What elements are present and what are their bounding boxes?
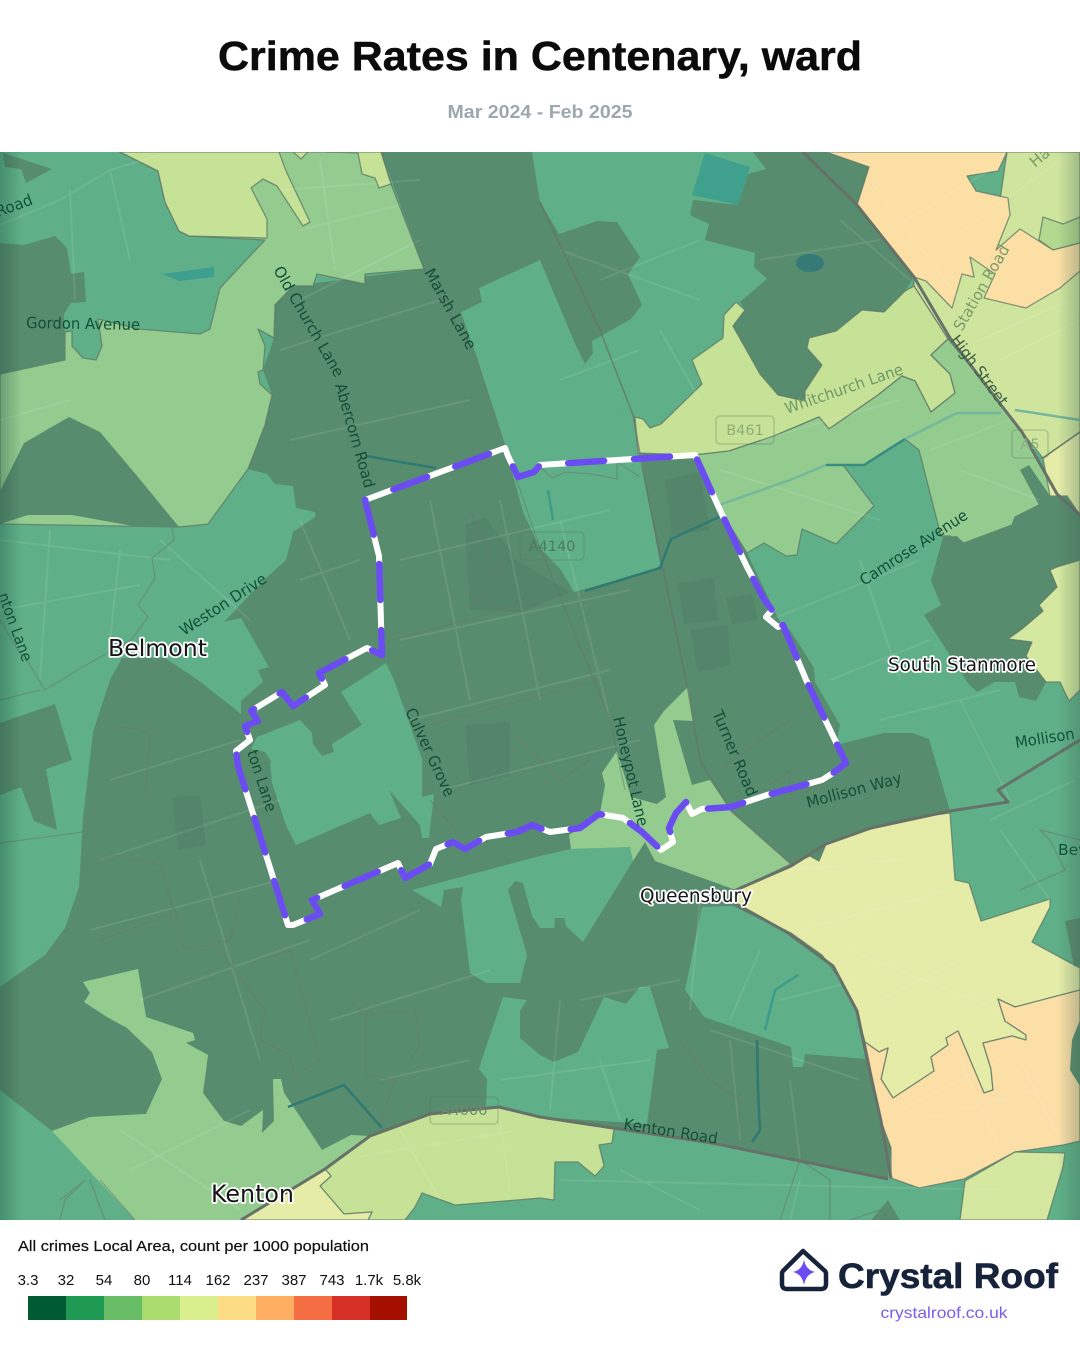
place label: Kenton: Kenton xyxy=(211,1180,294,1208)
road label: Gordon Avenue: Gordon Avenue xyxy=(26,314,140,334)
area: pale green Kenton xyxy=(320,1107,614,1220)
icon: Crystal Roof house logo xyxy=(782,1251,826,1289)
road label: Marsh Lane: Marsh Lane xyxy=(421,265,480,353)
legend scale labels: 54 xyxy=(96,1272,112,1289)
map edge shading xyxy=(0,152,1080,1220)
water: pond in north east xyxy=(796,254,824,272)
road shield: A4006 xyxy=(430,1097,498,1124)
legend scale labels: 387 xyxy=(281,1272,307,1289)
road shield: B461 xyxy=(716,416,774,444)
legend scale labels: 114 xyxy=(168,1272,192,1289)
road label: Turner Road: Turner Road xyxy=(708,707,761,799)
road label: Kenton Road: Kenton Road xyxy=(622,1115,719,1148)
ward boundary: Centenary xyxy=(236,448,846,925)
street network xyxy=(0,155,1080,1220)
road label: Abercorn Road: Abercorn Road xyxy=(331,381,378,490)
legend scale labels: 80 xyxy=(134,1272,150,1289)
place label: South Stanmore: South Stanmore xyxy=(888,654,1036,676)
area: light patch north east xyxy=(1039,217,1080,250)
legend scale labels: 237 xyxy=(243,1272,269,1289)
area: darker blocks inside ward xyxy=(172,472,758,850)
area: peach south east xyxy=(865,990,1080,1188)
water: teal reservoir xyxy=(692,153,750,205)
road label: Culver Grove: Culver Grove xyxy=(401,705,458,800)
subtitle: date range: Mar 2024 - Feb 2025 xyxy=(448,102,632,122)
area: yellow east of A5 xyxy=(1043,432,1080,515)
road shield: A5 xyxy=(1012,430,1048,458)
road shield: B461: B461 xyxy=(726,423,764,439)
internal boundary lines xyxy=(0,462,1080,1220)
area: mid green south of Queensbury xyxy=(685,906,867,1067)
legend scale labels: 743 xyxy=(319,1272,345,1289)
road label: Mollison east: Mollison xyxy=(1014,725,1076,752)
road label: Mollison Way: Mollison Way xyxy=(804,769,904,812)
area: mid green south of ward xyxy=(412,847,633,983)
legend scale labels: 32 xyxy=(58,1272,74,1289)
road label: Old Church Lane: Old Church Lane xyxy=(270,263,348,380)
area: pale green north xyxy=(120,152,310,238)
choropleth map xyxy=(0,144,1080,1220)
area: pale green small xyxy=(293,152,308,159)
map base: mid green areas xyxy=(0,152,1080,1220)
legend scale labels: 3.3 xyxy=(18,1272,38,1289)
road label: Whitchurch Lane: Whitchurch Lane xyxy=(782,360,906,418)
road shield: A4140: A4140 xyxy=(529,539,575,555)
area: mid green block in ward west xyxy=(270,663,434,845)
road label: Weston Drive: Weston Drive xyxy=(176,570,270,639)
legend colour bar xyxy=(28,1296,407,1320)
area: pale east xyxy=(1008,560,1080,701)
legend scale labels: 162 xyxy=(205,1272,231,1289)
area: pale green north tab xyxy=(327,152,391,188)
area: central dark green low crime zone xyxy=(0,152,950,1179)
road shield: A4006: A4006 xyxy=(441,1103,487,1119)
area: yellow south east xyxy=(729,813,1080,1098)
legend scale labels: 1.7k xyxy=(355,1272,384,1289)
area: dark patch near Bevan xyxy=(1065,918,1080,966)
road shield: A4140 xyxy=(520,532,584,560)
area: dark north east xyxy=(690,152,914,401)
roads and rail lines xyxy=(241,152,1080,1220)
area: pale Whitchurch Lane xyxy=(635,286,955,455)
place label: Belmont: Belmont xyxy=(108,636,207,662)
area: dark hill in Belmont park xyxy=(0,417,179,527)
area: pale far north east xyxy=(914,152,1080,458)
road label: Honeypot Lane: Honeypot Lane xyxy=(609,715,652,828)
place label: Queensbury: Queensbury xyxy=(640,885,752,907)
legend title: All crimes Local Area, count per 1000 population xyxy=(18,1238,369,1255)
road label: Station Road: Station Road xyxy=(950,242,1013,334)
streams xyxy=(288,410,1080,1142)
area: mid green lower centre xyxy=(479,987,669,1124)
logo wordmark: Crystal Roof xyxy=(838,1257,1058,1296)
website link: crystalroof.co.uk xyxy=(880,1305,1009,1322)
area: small dark triangle xyxy=(871,1200,900,1220)
area: light green east of ward xyxy=(695,339,1057,556)
area: north mid green pocket xyxy=(461,260,661,592)
area: dark patch at south east edge xyxy=(1070,1020,1080,1086)
road label: Camrose Avenue: Camrose Avenue xyxy=(856,506,971,589)
water: north west pond xyxy=(162,267,214,281)
area: dark east xyxy=(924,465,1080,701)
area: light green south west xyxy=(52,969,370,1220)
road label: Kenton Lane fragment: ton Lane xyxy=(243,748,280,814)
title: Crime Rates in Centenary, ward xyxy=(218,33,862,79)
area: west dark patch xyxy=(0,704,72,830)
area: pale south east xyxy=(960,1152,1065,1220)
area: top left dark corner xyxy=(0,152,52,183)
area: light green Queensbury xyxy=(569,687,791,890)
area: mid green block west of ward xyxy=(251,720,313,763)
road shield: A5: A5 xyxy=(1020,437,1040,453)
area: dark west block xyxy=(0,236,86,374)
legend scale labels: 5.8k xyxy=(393,1272,422,1289)
road label: High Street: High Street xyxy=(947,332,1012,409)
road label: Ha fragment: Ha xyxy=(1026,144,1054,171)
area: light green north west xyxy=(0,152,424,527)
area: peach north east xyxy=(826,152,1080,308)
legend scale labels xyxy=(18,1272,422,1289)
area: yellow Kenton xyxy=(241,1169,372,1220)
